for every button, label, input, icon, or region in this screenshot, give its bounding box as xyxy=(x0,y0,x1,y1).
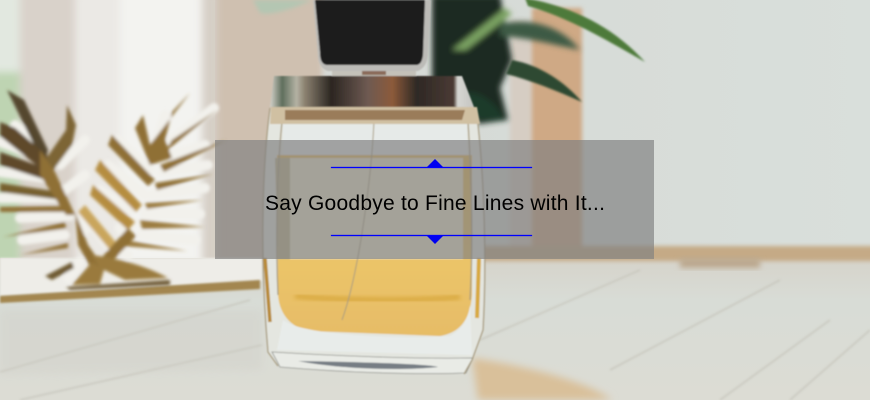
table wood grain xyxy=(0,270,870,400)
panel: title overlay xyxy=(215,140,654,259)
perfume bottle xyxy=(263,0,485,374)
gold palm ornament xyxy=(0,90,226,290)
bottle glass body xyxy=(263,108,484,374)
gold tray xyxy=(0,280,260,303)
white leaf highlights xyxy=(0,108,214,278)
table xyxy=(0,258,870,400)
atomiser ring xyxy=(332,66,416,76)
clear glass base xyxy=(277,305,472,355)
wall xyxy=(0,0,870,270)
warm reflection on table xyxy=(472,358,612,400)
metal collar xyxy=(270,76,474,107)
top blue line xyxy=(331,167,532,168)
bottle edges xyxy=(263,108,485,374)
top blue diamond xyxy=(427,159,443,167)
window and curtain xyxy=(0,0,217,272)
heading: Say Goodbye to Fine Lines with It... xyxy=(265,192,605,215)
left beige wall area xyxy=(212,0,322,270)
bottle neck band xyxy=(270,107,480,124)
perfume liquid xyxy=(277,155,472,336)
white shelf surface xyxy=(0,258,262,296)
plant xyxy=(432,0,580,124)
wood pillar xyxy=(510,20,536,260)
bottom blue line xyxy=(331,235,532,236)
white interior above liquid xyxy=(283,118,467,163)
black cap xyxy=(313,0,431,71)
bottom blue diamond xyxy=(427,236,443,244)
window ornament leaf top xyxy=(253,0,312,14)
